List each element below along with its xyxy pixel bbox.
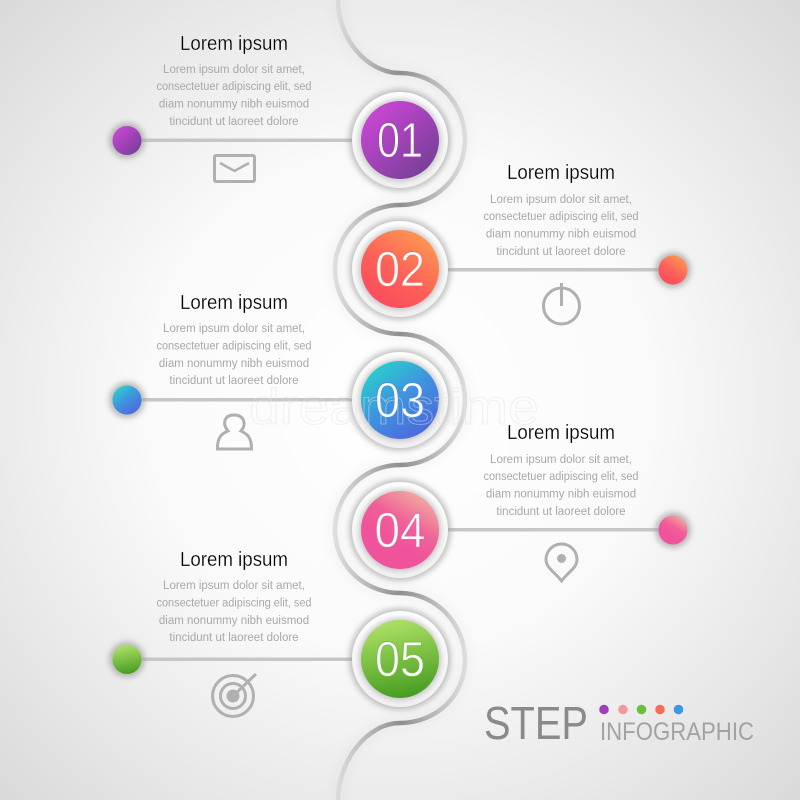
step 01	[109, 32, 451, 191]
body text 05: consectetuer adipiscing elit, sed	[156, 598, 312, 610]
body text 03: Lorem ipsum dolor sit amet,	[163, 323, 305, 335]
number badge 02	[349, 218, 451, 320]
body text 04: Lorem ipsum dolor sit amet,	[490, 454, 632, 466]
step 04	[349, 421, 691, 581]
body text 03	[156, 323, 312, 387]
end dot 02	[655, 252, 691, 288]
body text 03: consectetuer adipiscing elit, sed	[156, 340, 312, 352]
body text 01: diam nonummy nibh euismod	[159, 98, 309, 110]
body text 03: diam nonummy nibh euismod	[159, 358, 309, 370]
logo word: INFOGRAPHIC: INFOGRAPHIC	[600, 718, 754, 746]
body text 04: tincidunt ut laoreet dolore	[496, 506, 626, 518]
watermark: dreamstime	[249, 379, 539, 435]
winding timeline curve	[335, 0, 465, 800]
number badge 03	[349, 349, 451, 451]
body text 05: diam nonummy nibh euismod	[159, 615, 309, 627]
end dot 04	[655, 512, 691, 548]
body text 01: tincidunt ut laoreet dolore	[169, 116, 299, 128]
end dot 01	[109, 122, 145, 158]
connector line 03	[136, 398, 354, 402]
logo word: STEP: STEP	[484, 697, 588, 749]
number badge 04: 04	[374, 504, 426, 558]
number badge 05: 05	[375, 633, 425, 687]
icon: envelope	[214, 156, 254, 182]
body text 01: consectetuer adipiscing elit, sed	[156, 81, 312, 93]
body text 02: diam nonummy nibh euismod	[486, 228, 636, 240]
connector line 04	[446, 528, 664, 532]
connector line 05	[136, 658, 354, 661]
number badge 02: 02	[375, 243, 425, 297]
step 02	[349, 161, 691, 324]
end dot 03	[109, 382, 145, 418]
heading 02: Lorem ipsum	[507, 161, 615, 184]
body text 02: consectetuer adipiscing elit, sed	[484, 211, 638, 223]
number badge 04	[349, 479, 451, 581]
end dot 05	[109, 642, 145, 678]
body text 05: tincidunt ut laoreet dolore	[169, 632, 299, 644]
icon: power	[544, 283, 580, 324]
body text 02: Lorem ipsum dolor sit amet,	[490, 194, 632, 206]
heading 05: Lorem ipsum	[180, 548, 288, 571]
body text 04: consectetuer adipiscing elit, sed	[484, 471, 638, 483]
body text 01	[156, 64, 312, 128]
logo: step infographic	[484, 697, 754, 749]
number badge 05	[349, 608, 451, 710]
body text 04: diam nonummy nibh euismod	[486, 488, 636, 500]
body text 01: Lorem ipsum dolor sit amet,	[163, 64, 305, 76]
body text 03: tincidunt ut laoreet dolore	[169, 375, 299, 387]
body text 02: tincidunt ut laoreet dolore	[496, 246, 626, 258]
icon: target	[212, 674, 256, 716]
icon: person	[217, 415, 252, 449]
body text 04	[484, 454, 638, 518]
step 03	[109, 291, 451, 451]
number badge 03: 03	[375, 374, 425, 428]
connector line 02	[446, 268, 664, 272]
body text 05: Lorem ipsum dolor sit amet,	[163, 580, 305, 592]
heading 03: Lorem ipsum	[180, 291, 288, 314]
heading 04: Lorem ipsum	[507, 421, 615, 444]
body text 02	[484, 194, 638, 258]
icon: map pin	[546, 544, 577, 581]
heading 01: Lorem ipsum	[180, 32, 288, 55]
body text 05	[156, 580, 312, 644]
number badge 01: 01	[377, 114, 423, 168]
number badge 01	[349, 89, 451, 191]
connector line 01	[136, 138, 354, 142]
logo dots	[599, 705, 683, 714]
step 05	[109, 548, 451, 716]
